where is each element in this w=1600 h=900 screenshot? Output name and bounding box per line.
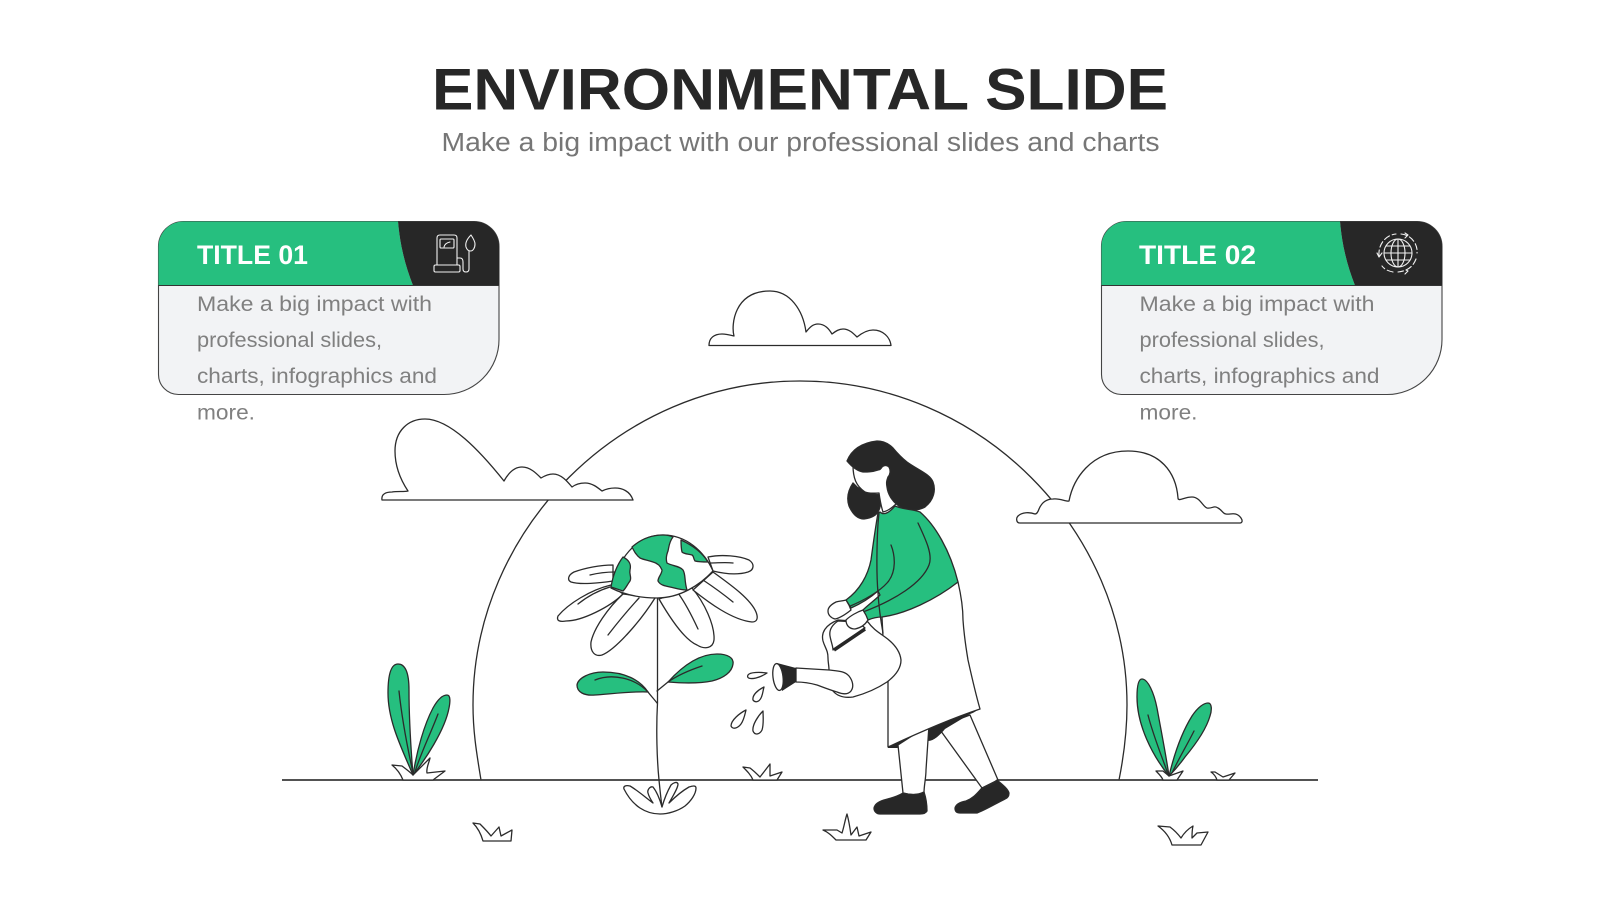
drop 1 (748, 672, 767, 679)
leaf veins (399, 691, 438, 773)
rose cone (777, 663, 796, 691)
plant: left (388, 664, 450, 780)
heading: TITLE 01 (197, 240, 308, 270)
watering can (771, 620, 901, 697)
petal: bottom right (659, 588, 714, 648)
body text: charts, infographics and (197, 364, 437, 388)
subtitle: Make a big impact with our professional slides and charts (442, 129, 1160, 157)
drop 4 (753, 711, 763, 734)
panel background (1102, 221, 1442, 394)
spout (796, 668, 853, 694)
drop 2 (753, 687, 764, 702)
water drops (731, 672, 767, 734)
stem (657, 599, 662, 807)
flower (557, 535, 757, 814)
rose opening (771, 663, 785, 691)
leaf veins (595, 666, 702, 692)
grass tuft (392, 758, 445, 780)
panel: title 02 (1102, 221, 1442, 424)
body text (197, 292, 437, 424)
tuft: near flower (743, 764, 782, 780)
under skirt shadow (888, 707, 980, 748)
heading: TITLE 02 (1139, 240, 1256, 270)
header divider (1102, 284, 1442, 286)
front shoe (874, 792, 927, 814)
back shoe (955, 780, 1009, 813)
icon: recycling globe (1377, 233, 1417, 274)
tuft: far right on ground (1211, 772, 1235, 780)
green header (1102, 222, 1355, 286)
cloud: left (382, 419, 633, 500)
globe land: right (681, 540, 708, 562)
body text: more. (197, 400, 255, 424)
body text: Make a big impact with (1140, 292, 1374, 316)
globe land: left (611, 557, 631, 591)
hand: right (846, 610, 868, 629)
face and neck (853, 465, 897, 512)
sun arch (473, 381, 1127, 780)
can handle opening (830, 621, 865, 650)
plant: right (1137, 679, 1211, 780)
hair back (848, 483, 881, 519)
tall leaf (1137, 679, 1169, 776)
grass tuft (1156, 771, 1183, 780)
globe flower head (611, 535, 713, 598)
sweater fold lines (848, 513, 930, 633)
header divider (158, 284, 499, 286)
woman watering (771, 441, 1009, 814)
can body (823, 620, 901, 697)
front leg (898, 725, 929, 794)
body text: professional slides, (197, 328, 382, 352)
panel background (158, 221, 499, 394)
hand: left (828, 600, 851, 619)
back leg (938, 715, 998, 788)
title: ENVIRONMENTAL SLIDE (432, 58, 1168, 122)
short leaf (413, 695, 450, 775)
body text: more. (1140, 400, 1198, 424)
petal: right (693, 572, 757, 622)
leaf: right (657, 654, 733, 691)
tuft: bottom left (473, 823, 512, 841)
panel: title 01 (158, 221, 499, 424)
green header (158, 222, 413, 286)
petal: left (557, 585, 623, 621)
tall leaf (388, 664, 413, 775)
sweater (846, 506, 958, 620)
root tuft (624, 782, 696, 814)
dark icon tab (398, 221, 499, 286)
can top band (834, 629, 865, 650)
globe land: centre (632, 535, 687, 590)
short leaf (1169, 703, 1211, 776)
petal: top left (569, 565, 613, 584)
body text: charts, infographics and (1140, 364, 1380, 388)
leaf veins (1148, 715, 1194, 774)
icon: biofuel pump (434, 235, 475, 272)
hair (847, 441, 934, 510)
body text: Make a big impact with (197, 292, 432, 316)
body text: professional slides, (1140, 328, 1324, 352)
dark icon tab (1340, 221, 1442, 286)
skirt (882, 582, 980, 747)
tuft: bottom right (1158, 826, 1208, 845)
petal veins (578, 563, 733, 635)
ground line (282, 779, 1318, 781)
petal: top right (708, 556, 753, 574)
cloud: top (709, 291, 891, 346)
cloud: right (1017, 451, 1242, 523)
drop 3 (731, 710, 746, 728)
leaf: left (577, 672, 657, 703)
petal: bottom left (591, 594, 655, 655)
tuft: bottom middle (823, 814, 871, 840)
body text (1140, 292, 1380, 424)
grass tufts (473, 764, 1235, 845)
